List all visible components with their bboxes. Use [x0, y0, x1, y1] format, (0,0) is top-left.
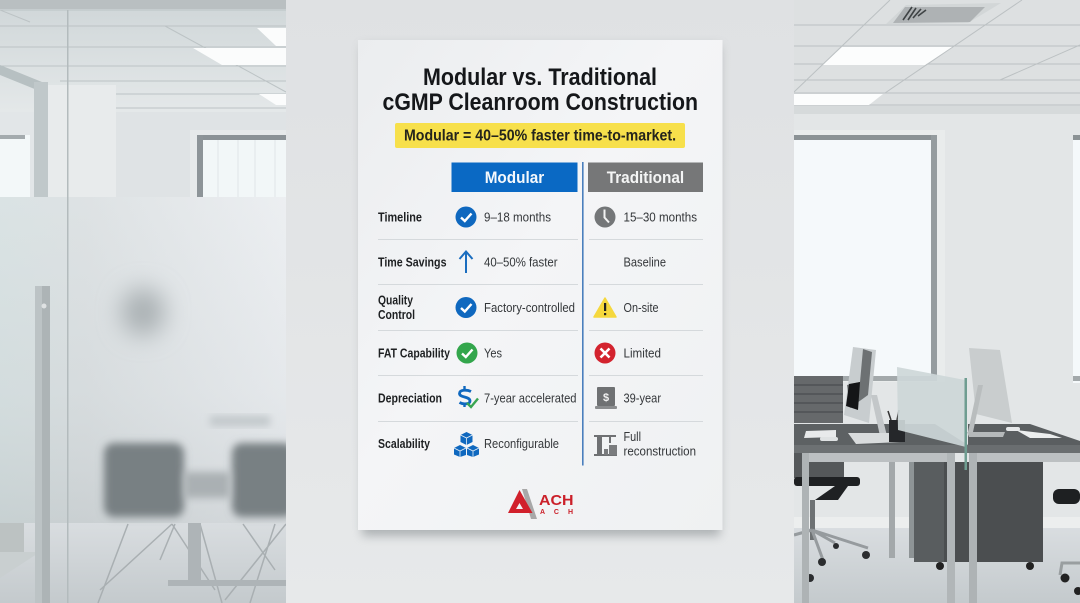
floor — [0, 523, 286, 603]
row: Time Savings: Baseline — [624, 254, 666, 270]
row: Scalability: reconstruction — [624, 444, 696, 458]
column header: Traditional — [588, 162, 703, 192]
row: Depreciation: 7-year accelerated — [484, 390, 576, 406]
back desk legs — [889, 462, 895, 558]
door handle — [35, 286, 50, 603]
frosted glass film — [0, 197, 286, 523]
logo: ACH: A C H — [540, 509, 573, 516]
row: Depreciation: 39-year — [624, 390, 662, 406]
callout: yellow highlight — [395, 123, 685, 148]
row: Timeline: Timeline — [378, 210, 422, 224]
central wall — [286, 0, 794, 603]
row: Time Savings: Time Savings — [378, 254, 446, 270]
left office area behind frosted glass — [0, 0, 294, 603]
icon: construction crane — [594, 436, 617, 456]
callout: yellow highlight: Modular = 40–50% faster time-to-market. — [404, 128, 676, 144]
row: Depreciation — [378, 386, 662, 409]
ceiling lights left — [193, 28, 286, 105]
row: Quality Control — [378, 292, 658, 322]
icon: clock — [594, 206, 616, 228]
row: FAT Capability — [378, 342, 661, 364]
window right — [794, 130, 1080, 383]
poster shadow — [362, 46, 720, 536]
title: cGMP Cleanroom Construction — [382, 89, 698, 116]
icon: green check — [456, 342, 478, 364]
window left wall — [190, 130, 286, 197]
office chair — [794, 376, 870, 582]
icon: up arrow — [460, 252, 472, 273]
column header: Traditional: Traditional — [607, 168, 684, 187]
row: Timeline — [378, 206, 697, 228]
row: Scalability: Scalability — [378, 436, 431, 451]
poster panel — [358, 40, 722, 530]
desks — [794, 424, 1080, 603]
glass door edge — [67, 10, 68, 603]
icon: dollar monitor: $ — [603, 392, 609, 404]
logo: ACH: ACH — [539, 492, 574, 509]
left monitor — [804, 347, 900, 444]
title: Modular vs. Traditional — [423, 64, 657, 91]
row: FAT Capability: Yes — [484, 346, 502, 360]
vertical divider — [582, 162, 584, 466]
row: Timeline: 15–30 months — [624, 210, 697, 224]
row: FAT Capability: Limited — [624, 346, 661, 360]
row: Scalability: Full — [624, 429, 641, 444]
row: Depreciation: Depreciation — [378, 390, 442, 406]
icon: stacked cubes — [454, 432, 479, 457]
row: Quality Control: Control — [378, 307, 415, 322]
icon: blue check — [456, 206, 476, 228]
icon: dollar monitor — [595, 387, 617, 409]
right office area — [794, 0, 1080, 603]
right monitor — [967, 348, 1062, 438]
row: Time Savings — [378, 252, 666, 273]
row: Quality Control: On-site — [624, 300, 658, 315]
column header: Modular — [452, 162, 578, 192]
row: Scalability — [378, 429, 696, 458]
row: Time Savings: 40–50% faster — [484, 254, 558, 270]
ceiling lights right — [794, 47, 952, 105]
logo: ACH — [508, 489, 574, 519]
second chair — [1053, 489, 1080, 595]
row: Quality Control: Factory-controlled — [484, 300, 575, 315]
frosted desk divider — [897, 367, 967, 470]
row: FAT Capability: FAT Capability — [378, 346, 451, 360]
blurred chairs and table — [104, 288, 294, 517]
ceiling vent — [886, 3, 1001, 24]
row: Scalability: Reconfigurable — [484, 436, 559, 451]
column header: Modular: Modular — [485, 168, 545, 187]
title — [382, 64, 698, 116]
icon: dollar with check — [460, 386, 478, 407]
row: Timeline: 9–18 months — [484, 210, 551, 224]
icon: warning triangle — [594, 298, 616, 317]
cabinet — [914, 462, 1043, 570]
row: Quality Control: Quality — [378, 292, 414, 308]
pen holder — [888, 410, 905, 442]
icon: blue check — [456, 297, 476, 318]
icon: red cross — [594, 342, 616, 364]
